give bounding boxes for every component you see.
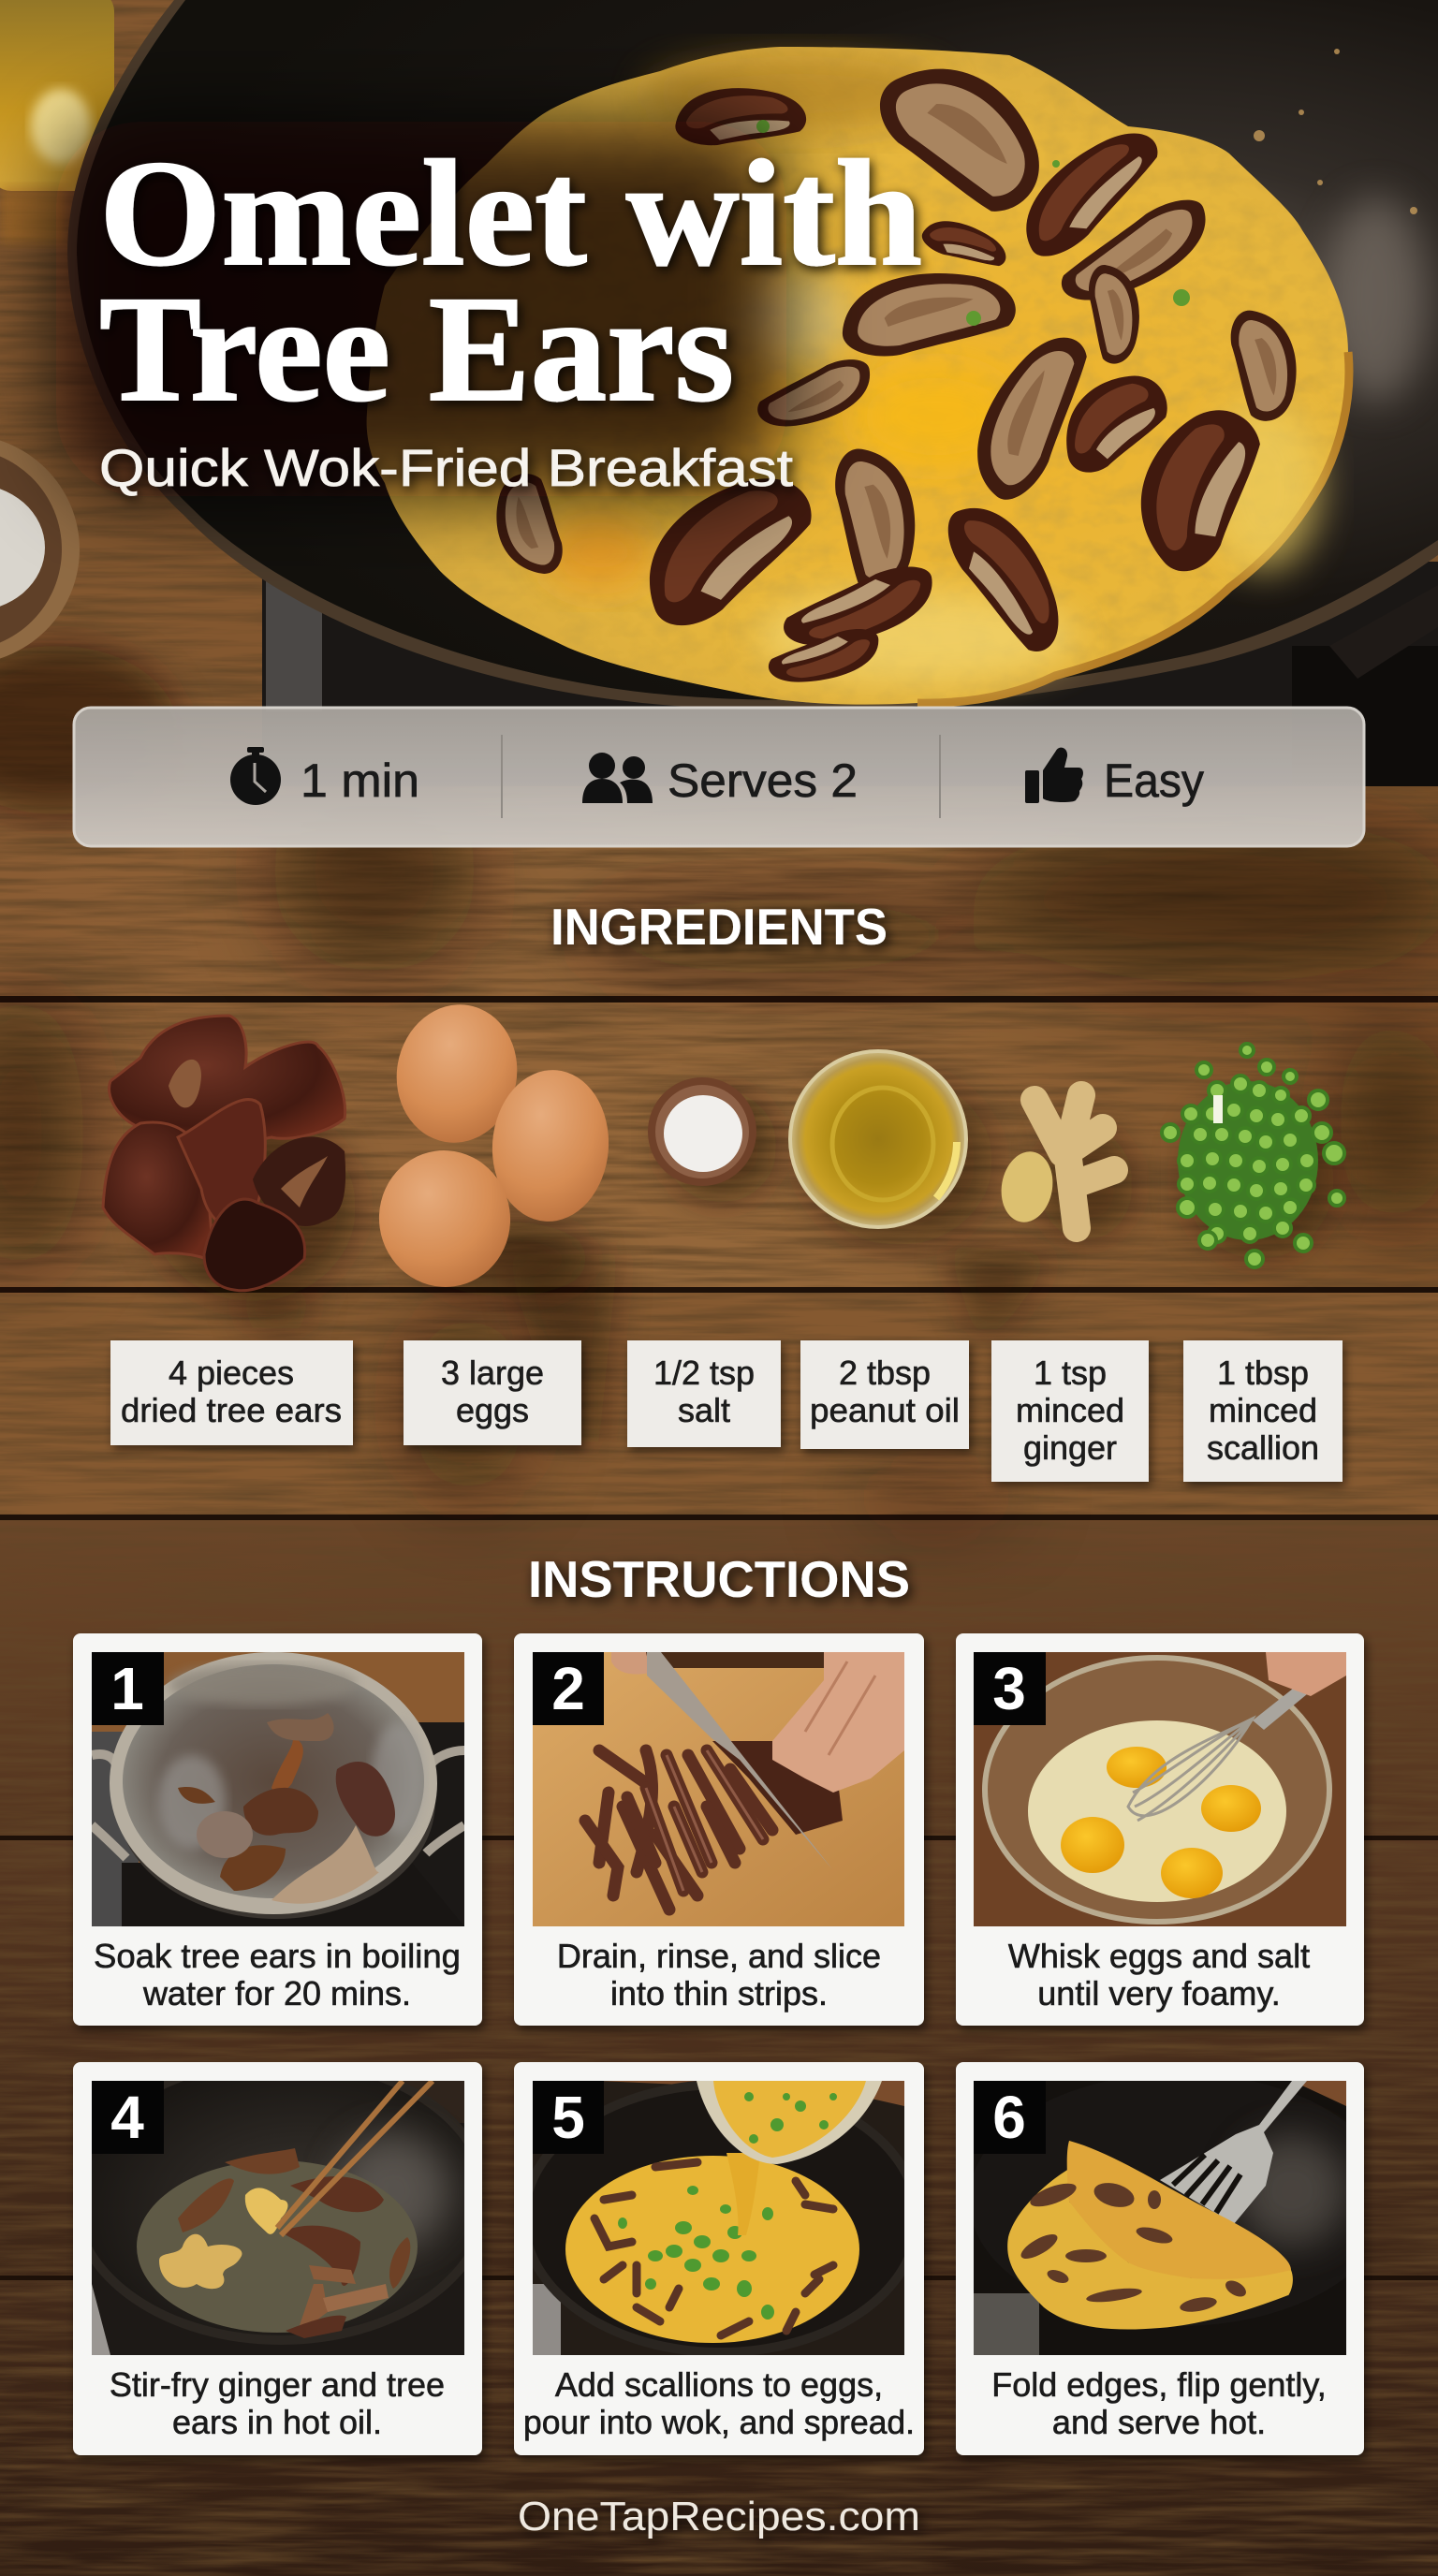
label: salt: 1/2 tsp <box>653 1354 755 1392</box>
badge 3 <box>974 1652 1046 1725</box>
ingredient: peanut oil bowl <box>789 1050 992 1245</box>
badge 6: 6 <box>992 2084 1026 2151</box>
step 6 text: and serve hot. <box>1052 2403 1266 2441</box>
badge 6 <box>974 2081 1046 2154</box>
stove burner <box>262 562 1438 786</box>
badge 3: 3 <box>992 1655 1026 1722</box>
salt bowl at left <box>0 434 80 665</box>
ingredient labels <box>110 1340 1343 1482</box>
step 5 photo: pouring egg <box>520 2080 922 2357</box>
label: scallion: 1 tbsp <box>1217 1354 1309 1392</box>
label: scallion: scallion <box>1207 1428 1319 1467</box>
ingredient: salt bowl <box>648 1077 777 1203</box>
label: tree ears: dried tree ears <box>121 1391 342 1429</box>
step 6 photo: folded omelet <box>969 2073 1390 2355</box>
label: salt <box>627 1340 781 1447</box>
heading: instructions: INSTRUCTIONS <box>528 1550 910 1608</box>
title: Omelet with <box>99 130 922 298</box>
label: scallion <box>1183 1340 1343 1482</box>
label: ginger: ginger <box>1023 1428 1117 1467</box>
footer website: OneTapRecipes.com <box>518 2494 920 2539</box>
step 4 text: ears in hot oil. <box>172 2403 382 2441</box>
step 2 text: into thin strips. <box>610 1974 828 2012</box>
subtitle: Quick Wok-Fried Breakfast <box>99 438 793 497</box>
step 3 photo: whisking eggs <box>974 1652 1346 1926</box>
icon: people <box>582 753 653 803</box>
left table shading <box>0 646 178 814</box>
stat: difficulty: Easy <box>1104 754 1204 807</box>
label: tree ears <box>110 1340 353 1445</box>
title backdrop shadow <box>56 122 786 496</box>
badge 2 <box>533 1652 604 1725</box>
ingredient: eggs <box>371 995 613 1296</box>
label: oil <box>800 1340 969 1449</box>
stat: servings: Serves 2 <box>668 754 858 807</box>
label: eggs: eggs <box>456 1391 529 1429</box>
hero photo: omelet in wok <box>0 0 1438 814</box>
step 6 card <box>956 2062 1390 2455</box>
label: eggs: 3 large <box>441 1354 544 1392</box>
step 6 text <box>991 2365 1327 2441</box>
title <box>99 130 922 433</box>
step 4 photo: stir-fry <box>92 2081 464 2355</box>
label: ginger: minced <box>1016 1391 1124 1429</box>
stat: time: 1 min <box>301 754 419 807</box>
label: salt: salt <box>678 1391 730 1429</box>
step 4 text <box>110 2365 445 2441</box>
wok <box>67 0 1438 710</box>
step 5 text: Add scallions to eggs, <box>555 2365 883 2404</box>
glass of beer <box>0 0 114 243</box>
wood plank background <box>0 768 1438 2576</box>
label: oil: 2 tbsp <box>839 1354 931 1392</box>
step 5 text: pour into wok, and spread. <box>523 2403 915 2441</box>
label: oil: peanut oil <box>810 1391 960 1429</box>
step 1 card <box>73 1633 482 2026</box>
step 1 text: Soak tree ears in boiling <box>94 1937 461 1975</box>
ingredient: ginger <box>996 1095 1133 1240</box>
step 3 card <box>956 1633 1364 2026</box>
step 1 photo: boiling pot <box>92 1652 464 1926</box>
step 2 text <box>557 1937 881 2012</box>
ingredient: scallions <box>1162 1044 1344 1267</box>
stats bar <box>74 708 1364 846</box>
step 5 card <box>514 2062 924 2455</box>
chives <box>756 120 1190 326</box>
step 6 text: Fold edges, flip gently, <box>991 2365 1327 2404</box>
badge 5 <box>533 2081 604 2154</box>
heading: ingredients: INGREDIENTS <box>550 898 888 956</box>
ingredient: tree ears <box>103 1016 356 1301</box>
label: eggs <box>404 1340 581 1445</box>
step 3 text <box>1008 1937 1310 2012</box>
badge 2: 2 <box>551 1655 585 1722</box>
omelet <box>356 37 1357 711</box>
step 5 text <box>523 2365 915 2441</box>
step 3 text: Whisk eggs and salt <box>1008 1937 1310 1975</box>
oil droplets <box>1254 49 1417 214</box>
badge 4 <box>92 2081 164 2154</box>
badge 1 <box>92 1652 164 1725</box>
step 1 text <box>94 1937 461 2012</box>
step 2 card <box>514 1633 924 2026</box>
icon: stopwatch <box>230 747 281 805</box>
mushroom slices <box>487 37 1307 685</box>
title: Tree Ears <box>99 266 734 433</box>
step 2 text: Drain, rinse, and slice <box>557 1937 881 1975</box>
icon: thumbs up <box>1025 748 1083 803</box>
badge 1: 1 <box>110 1655 144 1722</box>
label: scallion: minced <box>1209 1391 1317 1429</box>
label: tree ears: 4 pieces <box>169 1354 294 1392</box>
label: ginger: 1 tsp <box>1034 1354 1107 1392</box>
step 1 text: water for 20 mins. <box>142 1974 411 2012</box>
badge 4: 4 <box>110 2084 144 2151</box>
label: ginger <box>991 1340 1149 1482</box>
step 4 card <box>70 2055 492 2455</box>
step 4 text: Stir-fry ginger and tree <box>110 2365 445 2404</box>
step 2 photo: slicing <box>533 1652 904 1926</box>
step 3 text: until very foamy. <box>1037 1974 1281 2012</box>
badge 5: 5 <box>551 2084 585 2151</box>
